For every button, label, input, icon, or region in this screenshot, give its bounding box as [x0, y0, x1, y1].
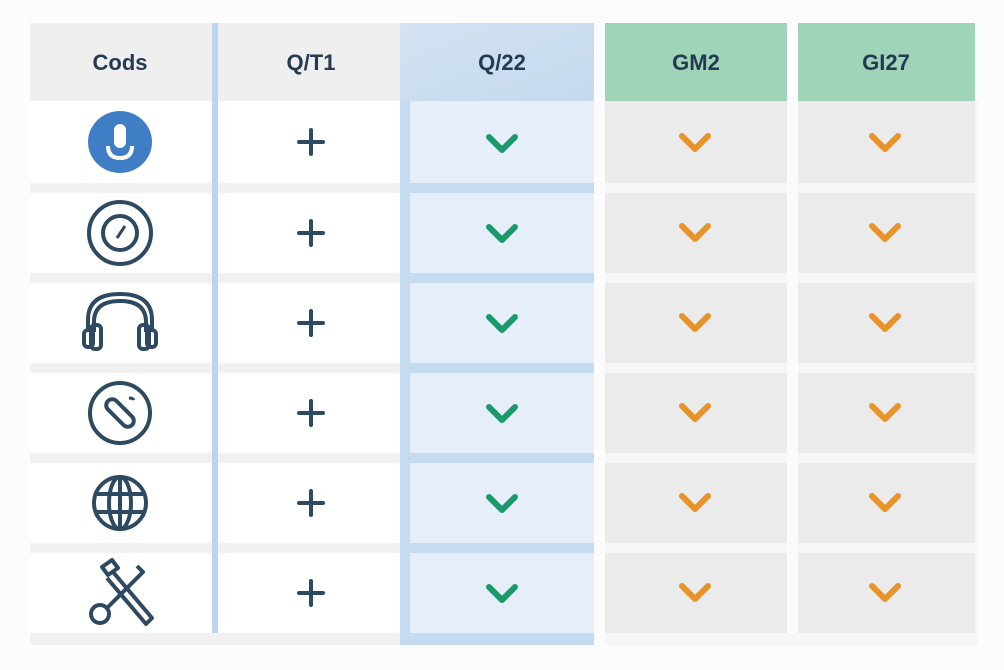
highlighted column background — [400, 101, 594, 645]
header row: GI27 — [862, 50, 910, 75]
column: GM2 orange checks — [682, 136, 708, 599]
icon: headphones — [84, 294, 156, 349]
header row: Q/T1 — [287, 50, 335, 75]
icon: microphone — [88, 111, 152, 173]
header row: Q/22 — [478, 50, 526, 75]
icon: gauge — [89, 202, 151, 264]
header row: GM2 — [672, 50, 720, 75]
column: GI27 orange checks — [872, 136, 898, 599]
column: Q/T1 plus marks — [299, 130, 323, 605]
icon: globe — [94, 477, 146, 529]
header row — [30, 23, 975, 101]
row cells — [30, 101, 400, 633]
column: Q/22 green checks — [489, 137, 515, 600]
icon: circle with pill — [90, 383, 150, 443]
icon: tools — [91, 560, 152, 624]
header row: Cods — [92, 50, 148, 75]
